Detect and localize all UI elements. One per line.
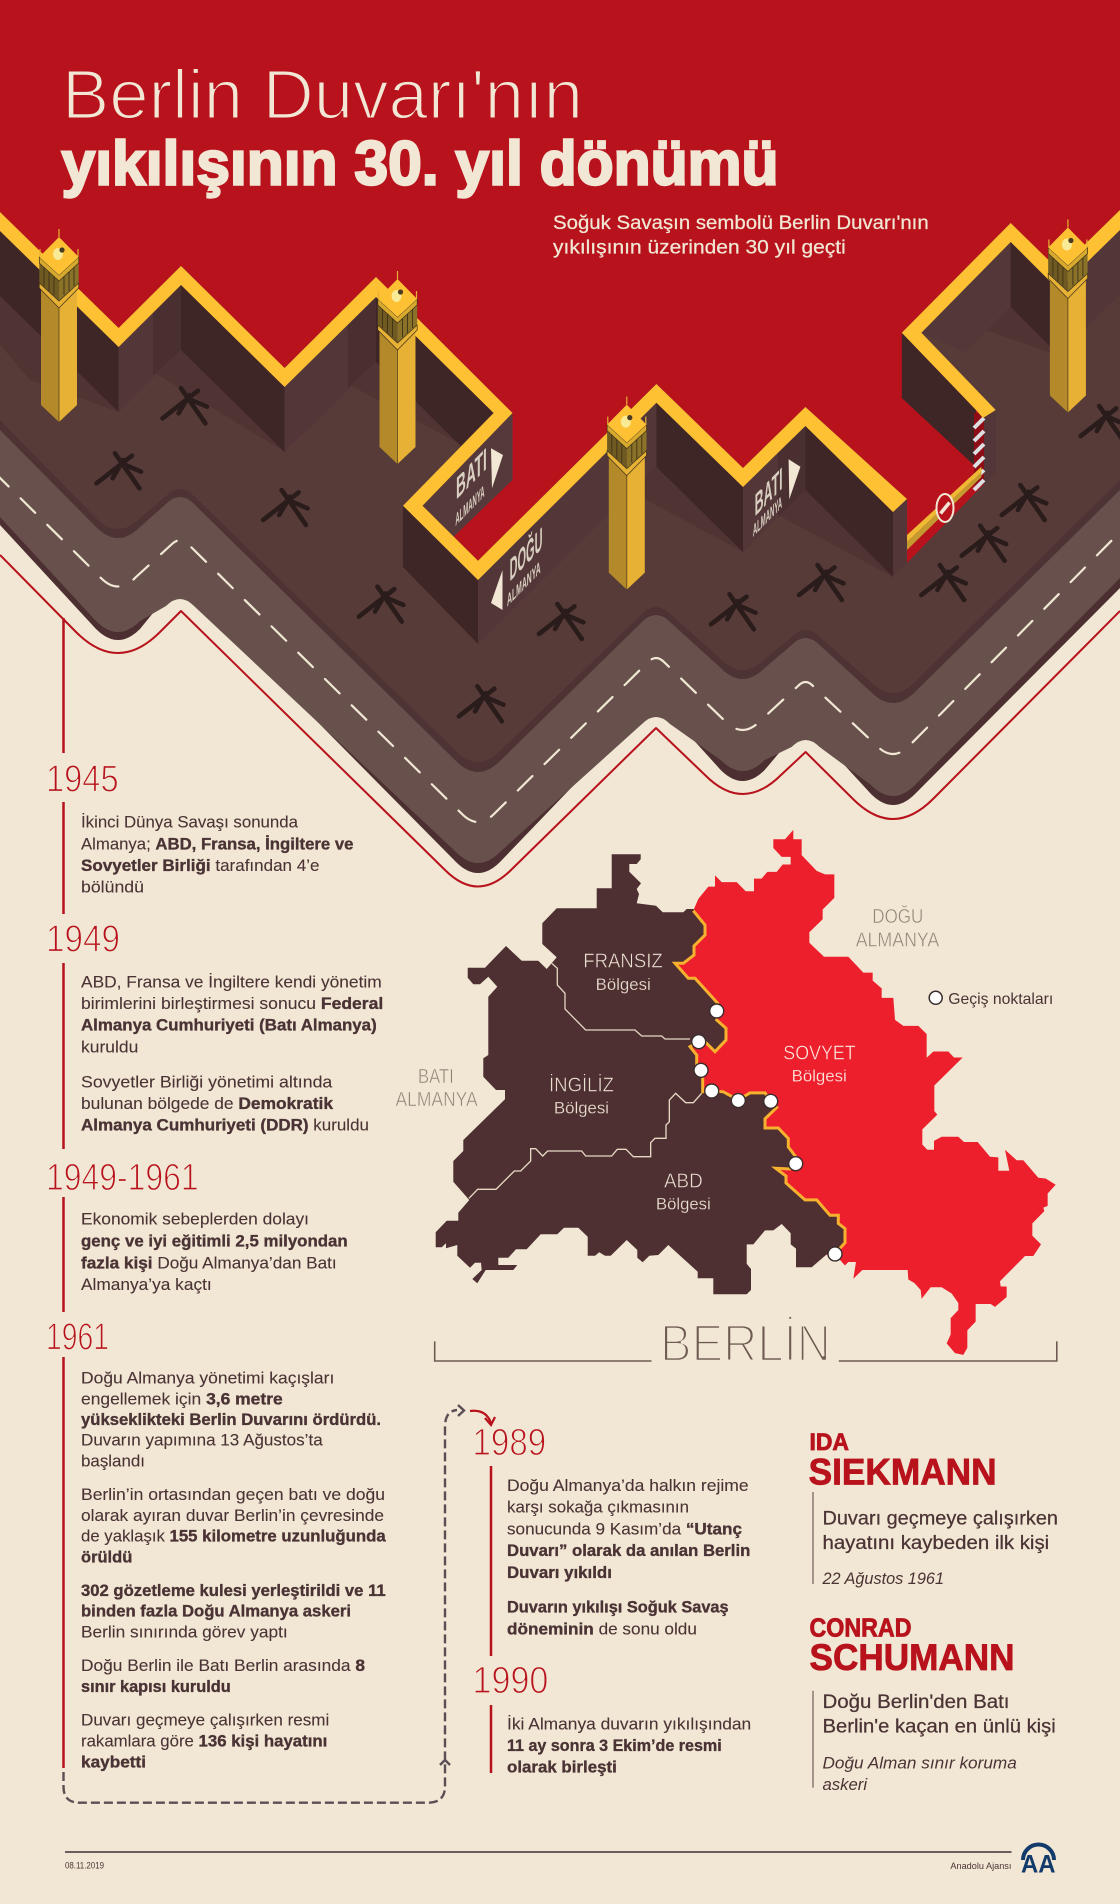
timeline 1945: 1945 <box>46 759 119 801</box>
wall shadows on ground <box>0 296 1060 577</box>
timeline 1990: 11 ay sonra 3 Ekim’de resmi <box>507 1736 722 1755</box>
timeline 1961: Berlin’in ortasından geçen batı ve doğu <box>81 1485 385 1504</box>
timeline 1961 <box>46 1316 386 1771</box>
road centre dashes <box>0 472 1120 822</box>
inner zone lines <box>469 963 702 1198</box>
watchtower 1 <box>39 229 79 422</box>
timeline 1949: birimlerini birleştirmesi sonucu Federal <box>81 994 383 1013</box>
timeline 1949: Almanya Cumhuriyeti (Batı Almanya) <box>81 1016 377 1035</box>
yellow wall top, left section <box>0 212 907 580</box>
watchtower 2 <box>378 271 417 464</box>
timeline 1945: Sovyetler Birliği tarafından 4’e <box>81 856 320 875</box>
timeline 1945: İkinci Dünya Savaşı sonunda <box>81 813 299 832</box>
label: Doğu Almanya: DOĞU <box>872 905 923 928</box>
label: Doğu Almanya: ALMANYA <box>856 929 940 951</box>
thin red outline below road <box>0 555 1120 886</box>
timeline 1949-1961: fazla kişi Doğu Almanya’dan Batı <box>81 1254 337 1273</box>
illustration: border strip with wall, road and towers <box>0 0 1120 886</box>
timeline 1949: ABD, Fransa ve İngiltere kendi yönetim <box>81 972 382 991</box>
label: Doğu Almanya <box>856 905 940 951</box>
ground rim <box>0 0 1120 772</box>
timeline 1989: karşı sokağa çıkmasının <box>507 1498 689 1517</box>
title: yıkılışının 30. yıl dönümü <box>62 129 778 198</box>
timeline 1961: örüldü <box>81 1547 132 1566</box>
yellow wall top, right section <box>902 210 1120 418</box>
zones: French, British, American <box>436 854 845 1294</box>
timeline line segments <box>64 618 491 1773</box>
label: Sovyet Bölgesi <box>783 1043 856 1085</box>
profile: Conrad Schumann: CONRAD <box>810 1615 912 1643</box>
timeline 1949-1961 <box>46 1157 348 1294</box>
sign: Batı Almanya, centre wall: BATI <box>755 460 783 524</box>
timeline 1961: yükseklikteki Berlin Duvarını ördürdü. <box>81 1410 381 1429</box>
timeline 1989: döneminin de sonu oldu <box>507 1620 697 1639</box>
timeline 1961: başlandı <box>81 1452 145 1471</box>
crossing points <box>692 1004 842 1261</box>
label: Batı Almanya: ALMANYA <box>396 1089 478 1111</box>
label: ABD Bölgesi: Bölgesi <box>656 1195 711 1213</box>
timeline 1949-1961: genç ve iyi eğitimli 2,5 milyondan <box>81 1232 348 1251</box>
timeline 1990: 1990 <box>472 1660 548 1702</box>
timeline 1961: de yaklaşık 155 kilometre uzunluğunda <box>81 1527 386 1546</box>
label: İngiliz Bölgesi <box>549 1074 614 1117</box>
sign: Batı Almanya, corner wall: BATI <box>456 440 487 507</box>
label: Batı Almanya: BATI <box>418 1066 454 1088</box>
wall faces <box>0 230 1120 644</box>
zone: Soviet <box>673 830 1056 1355</box>
sign: Batı Almanya, centre wall: ALMANYA <box>753 492 782 541</box>
legend: crossing points: Geçiş noktaları <box>948 991 1053 1008</box>
timeline 1989: sonucunda 9 Kasım’da “Utanç <box>507 1520 742 1539</box>
timeline 1961: sınır kapısı kuruldu <box>81 1677 231 1696</box>
timeline 1961: 302 gözetleme kulesi yerleştirildi ve 11 <box>81 1581 386 1600</box>
timeline 1945: Almanya; ABD, Fransa, İngiltere ve <box>81 834 354 853</box>
timeline 1961: Duvarın yapımına 13 Ağustos’ta <box>81 1431 323 1450</box>
sign: Batı Almanya, corner wall: ALMANYA <box>455 481 485 530</box>
timeline 1961: Doğu Berlin ile Batı Berlin arasında 8 <box>81 1656 365 1675</box>
timeline 1961: Doğu Almanya yönetimi kaçışları <box>81 1368 334 1387</box>
label: Berlin with bracket <box>435 1315 1057 1373</box>
red sky area <box>0 0 1120 563</box>
road outer edge <box>0 0 1120 873</box>
timeline 1961: binden fazla Doğu Almanya askeri <box>81 1602 351 1621</box>
profile: Conrad Schumann: Doğu Alman sınır koruma <box>822 1754 1017 1773</box>
timeline 1961: olarak ayıran duvar Berlin’in çevresinde <box>81 1506 384 1525</box>
profile: Ida Siekmann: Duvarı geçmeye çalışırken <box>822 1508 1058 1529</box>
profile: Conrad Schumann <box>810 1615 1056 1794</box>
timeline 1989: Doğu Almanya’da halkın rejime <box>507 1476 749 1495</box>
label: İngiliz Bölgesi: İNGİLİZ <box>549 1074 614 1097</box>
yellow east-west boundary <box>675 911 845 1254</box>
profile: Ida Siekmann <box>809 1429 1058 1588</box>
checkpoint barrier <box>907 413 984 550</box>
footer: 08.11.2019 <box>65 1861 104 1871</box>
timeline 1949: kuruldu <box>81 1037 138 1056</box>
timeline 1961: kaybetti <box>81 1752 146 1771</box>
timeline dashed connector <box>64 1405 464 1803</box>
icon: Anadolu Agency logo: AA <box>1021 1850 1056 1878</box>
timeline 1989 <box>472 1422 750 1639</box>
timeline 1990 <box>472 1660 751 1777</box>
timeline 1945: bölündü <box>81 878 144 897</box>
tank traps <box>96 388 1120 721</box>
profile: Ida Siekmann: 22 Ağustos 1961 <box>822 1569 944 1588</box>
label: Berlin with bracket: BERLİN <box>660 1315 831 1373</box>
label: Fransız Bölgesi: FRANSIZ <box>583 951 663 973</box>
sign: Doğu Almanya: ALMANYA <box>507 557 541 611</box>
timeline 1949: 1949 <box>46 919 120 961</box>
profile: Conrad Schumann: askeri <box>822 1775 868 1794</box>
title: Berlin Duvarı'nın <box>62 55 583 133</box>
timeline 1990: İki Almanya duvarın yıkılışından <box>507 1714 751 1733</box>
profile: Conrad Schumann: Doğu Berlin'den Batı <box>822 1692 1010 1713</box>
timeline 1949 <box>46 919 383 1135</box>
subtitle <box>553 213 929 258</box>
map of Berlin <box>396 830 1057 1373</box>
timeline 1949: Almanya Cumhuriyeti (DDR) kuruldu <box>81 1116 369 1135</box>
timeline 1949-1961: Almanya’ya kaçtı <box>81 1275 212 1294</box>
label: Sovyet Bölgesi: SOVYET <box>783 1043 856 1065</box>
watchtower 3 <box>607 397 646 590</box>
timeline 1961: Duvarı geçmeye çalışırken resmi <box>81 1711 329 1730</box>
timeline 1945 <box>46 759 354 897</box>
label: Fransız Bölgesi <box>583 951 663 994</box>
timeline 1961: rakamlara göre 136 kişi hayatını <box>81 1732 327 1751</box>
profile: Conrad Schumann: SCHUMANN <box>810 1636 1014 1678</box>
sign: Doğu Almanya: DOĞU <box>510 520 543 589</box>
timeline 1961: Berlin sınırında görev yaptı <box>81 1623 288 1642</box>
timeline 1989: 1989 <box>472 1422 546 1464</box>
profile: Conrad Schumann: Berlin'e kaçan en ünlü kişi <box>822 1717 1056 1738</box>
road surface <box>0 0 1120 863</box>
timeline 1949-1961: Ekonomik sebeplerden dolayı <box>81 1210 309 1229</box>
label: İngiliz Bölgesi: Bölgesi <box>554 1099 609 1117</box>
subtitle: Soğuk Savaşın sembolü Berlin Duvarı'nın <box>553 213 929 234</box>
label: Batı Almanya <box>396 1066 478 1111</box>
label: ABD Bölgesi <box>656 1171 711 1213</box>
no-entry sign <box>936 494 954 522</box>
ground <box>0 0 1120 762</box>
timeline 1949-1961: 1949-1961 <box>46 1157 199 1199</box>
timeline 1989: Duvarı yıkıldı <box>507 1563 612 1582</box>
timeline 1961: 1961 <box>46 1316 109 1358</box>
timeline 1949: Sovyetler Birliği yönetimi altında <box>81 1072 333 1091</box>
footer: Anadolu Ajansı <box>950 1861 1011 1871</box>
profile: Ida Siekmann: SIEKMANN <box>809 1450 997 1492</box>
sign: Doğu Almanya <box>491 520 542 611</box>
profile: Ida Siekmann: hayatını kaybeden ilk kişi <box>822 1533 1049 1554</box>
title <box>62 55 778 198</box>
profile: Ida Siekmann: IDA <box>810 1429 849 1456</box>
label: Fransız Bölgesi: Bölgesi <box>596 976 651 994</box>
timeline 1949: bulunan bölgede de Demokratik <box>81 1094 334 1113</box>
timeline 1990: olarak birleşti <box>507 1758 617 1777</box>
timeline 1989: Duvarı” olarak da anılan Berlin <box>507 1541 750 1560</box>
label: ABD Bölgesi: ABD <box>664 1171 703 1193</box>
watchtower 4 <box>1048 220 1088 412</box>
timeline 1961: engellemek için 3,6 metre <box>81 1389 283 1408</box>
red connector arrow <box>470 1411 495 1425</box>
footer <box>65 1844 1056 1878</box>
subtitle: yıkılışının üzerinden 30 yıl geçti <box>553 237 846 258</box>
label: Sovyet Bölgesi: Bölgesi <box>792 1067 847 1085</box>
timeline 1989: Duvarın yıkılışı Soğuk Savaş <box>507 1598 729 1617</box>
